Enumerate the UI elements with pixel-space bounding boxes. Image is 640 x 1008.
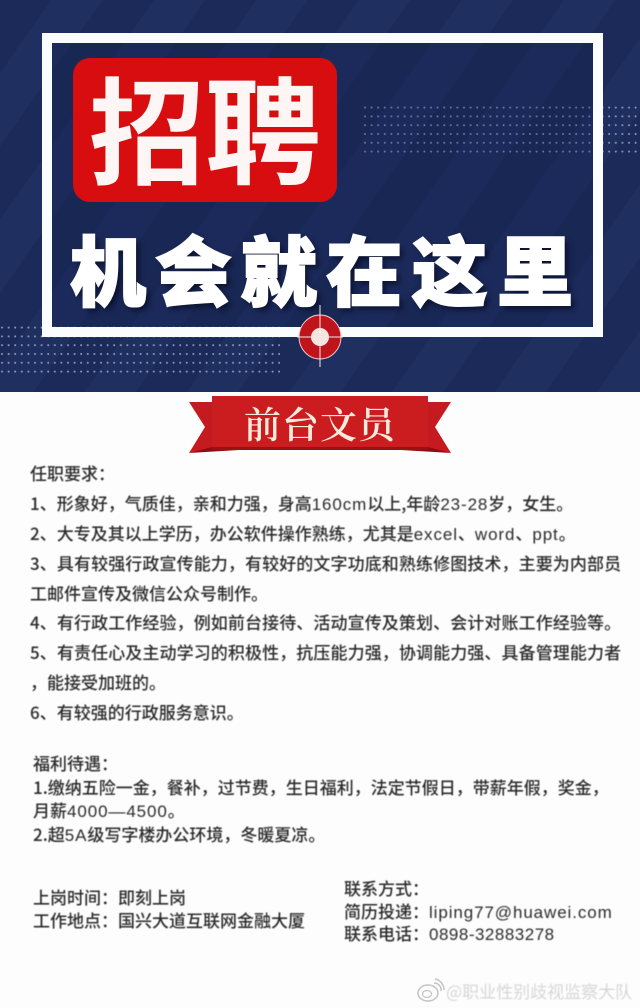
icon: weibo logo bbox=[417, 978, 445, 1002]
requirements text block: 任职要求： bbox=[30, 460, 115, 485]
contact details: 联系电话：0898-32883278 bbox=[344, 920, 555, 945]
main title 招聘: 招聘 bbox=[89, 41, 321, 209]
benefits text block: 2.超5A级写字楼办公环境，冬暖夏凉。 bbox=[33, 821, 325, 846]
start time and location: 工作地点：国兴大道互联网金融大厦 bbox=[33, 907, 305, 932]
contact details: 联系方式： bbox=[344, 875, 429, 900]
requirements text block: 工邮件宣传及微信公众号制作。 bbox=[30, 580, 268, 605]
requirements text block: ，能接受加班的。 bbox=[30, 669, 166, 694]
benefits text block bbox=[32, 750, 609, 846]
benefits text block: 1.缴纳五险一金，餐补，过节费，生日福利，法定节假日，带薪年假，奖金， bbox=[33, 774, 609, 799]
requirements text block: 6、有较强的行政服务意识。 bbox=[30, 699, 244, 724]
benefits text block: 福利待遇： bbox=[33, 750, 118, 775]
watermark text: @职业性别歧视监察大队 bbox=[446, 978, 632, 1003]
requirements text block: 3、具有较强行政宣传能力，有较好的文字功底和熟练修图技术，主要为内部员 bbox=[30, 550, 621, 575]
requirements text block: 2、大专及其以上学历，办公软件操作熟练，尤其是excel、word、ppt。 bbox=[30, 520, 576, 545]
hero banner bbox=[0, 0, 640, 392]
ribbon banner: job title bbox=[189, 395, 451, 453]
dot pattern: upper right bbox=[1, 106, 637, 373]
white frame bbox=[42, 33, 603, 337]
job title text: 前台文员 bbox=[244, 395, 396, 449]
start time and location: 上岗时间：即刻上岗 bbox=[33, 884, 186, 909]
contact details: 简历投递：liping77@huawei.com bbox=[344, 898, 613, 923]
requirements text block bbox=[30, 460, 621, 724]
requirements text block: 4、有行政工作经验，例如前台接待、活动宣传及策划、会计对账工作经验等。 bbox=[30, 609, 621, 634]
icon: target crosshair bbox=[297, 305, 343, 367]
contact details bbox=[344, 875, 613, 945]
watermark bbox=[417, 978, 632, 1003]
benefits text block: 月薪4000—4500。 bbox=[33, 797, 185, 822]
subtitle 机会就在这里: 机会就在这里 bbox=[70, 212, 582, 322]
requirements text block: 1、形象好，气质佳，亲和力强，身高160cm以上,年龄23-28岁，女生。 bbox=[30, 490, 573, 515]
requirements text block: 5、有责任心及主动学习的积极性，抗压能力强，协调能力强、具备管理能力者 bbox=[30, 639, 621, 664]
red title badge bbox=[73, 58, 337, 202]
start time and location bbox=[33, 884, 305, 932]
